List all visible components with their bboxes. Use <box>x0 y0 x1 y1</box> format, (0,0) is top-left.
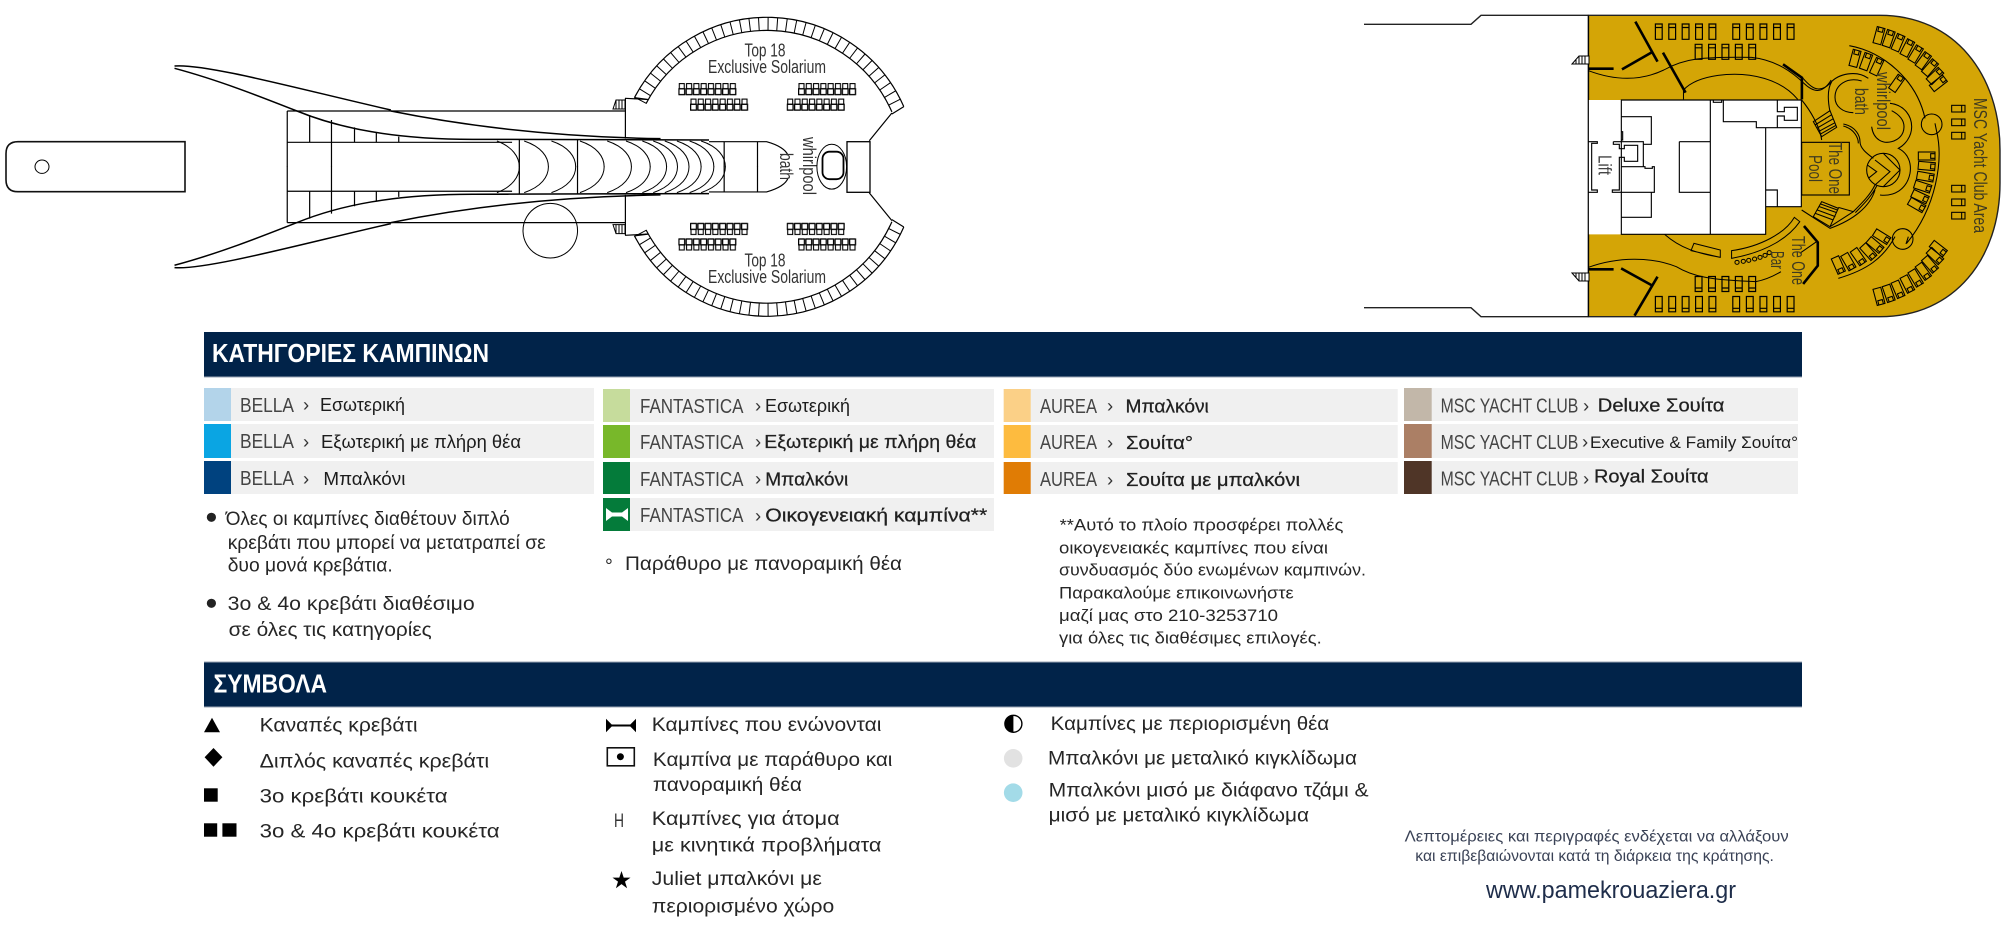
row: Executive and Family suite <box>1404 424 1798 458</box>
right deck plan: MSC Yacht Club <box>1364 15 2000 317</box>
row: Fantastica balcony <box>603 462 994 494</box>
row: Aurea suite with balcony <box>1004 462 1398 494</box>
panel: Fantastica categories <box>603 389 994 531</box>
row: Bella interior: › <box>303 394 309 415</box>
header: cabin categories <box>204 332 1802 378</box>
label: bottom solarium: Exclusive Solarium <box>708 266 826 287</box>
row: Fantastica ocean view: FANTASTICA <box>640 431 744 454</box>
row: Aurea balcony: Μπαλκόνι <box>1126 396 1209 417</box>
label: whirlpool bath: whirlpool <box>799 136 820 195</box>
row: Aurea balcony <box>1004 389 1398 422</box>
deck labels: Bar <box>1767 251 1788 269</box>
row: Royal suite: Royal Σουίτα <box>1594 466 1709 487</box>
interior white block <box>1588 15 1801 317</box>
header: symbols: ΣΥΜΒΟΛΑ <box>214 669 327 699</box>
note: family cabins: **Αυτό το πλοίο προσφέρει πολλές <box>1060 516 1343 535</box>
legend: obstructed view: Καμπίνες με περιορισμένη θέα <box>1051 713 1329 735</box>
deck labels: The One <box>1788 236 1809 285</box>
label: top solarium <box>708 40 826 77</box>
label: whirlpool bath: bath <box>776 153 797 180</box>
legend: accessible cabins: H <box>614 811 624 832</box>
legend: double sofa bed: Διπλός καναπές κρεβάτι <box>260 750 489 772</box>
thick walls and curved paths <box>1588 22 1831 316</box>
legend: Juliet balcony: Juliet μπαλκόνι με <box>652 868 822 890</box>
row: Bella balcony: › <box>303 468 309 489</box>
row: Aurea suite with balcony: AUREA <box>1040 468 1097 491</box>
note: family cabins <box>1059 516 1366 647</box>
row: Executive and Family suite: › <box>1582 431 1588 452</box>
row: Bella interior: BELLA <box>240 394 294 417</box>
row: Fantastica ocean view: Εξωτερική με πλήρη θέα <box>764 431 977 452</box>
legend: half glass balcony <box>1004 780 1369 827</box>
side stairs <box>1572 56 1589 281</box>
row: Aurea balcony: › <box>1107 395 1113 416</box>
row: Fantastica family: FANTASTICA <box>640 504 744 527</box>
row: Royal suite: › <box>1583 468 1589 489</box>
header: symbols <box>204 662 1802 708</box>
row: Deluxe suite: Deluxe Σουίτα <box>1598 395 1725 416</box>
row: Aurea suite: Σουίτα° <box>1126 432 1193 453</box>
row: Deluxe suite: › <box>1583 395 1589 416</box>
legend: sofa bed: Καναπές κρεβάτι <box>260 715 418 737</box>
legend: connecting cabins: Καμπίνες που ενώνονται <box>652 714 881 736</box>
row: Bella interior <box>204 388 594 421</box>
row: Fantastica family: Οικογενειακή καμπίνα** <box>765 505 987 526</box>
row: Bella ocean view <box>204 424 594 458</box>
legend: double sofa bed <box>205 748 489 772</box>
row: Bella ocean view: Εξωτερική με πλήρη θέα <box>321 431 521 452</box>
row: Executive and Family suite: Executive & Family Σουίτα° <box>1590 434 1798 452</box>
row: Royal suite <box>1404 461 1798 494</box>
note: family cabins: μαζί μας στο 210-3253710 <box>1059 606 1278 625</box>
row: Fantastica balcony: FANTASTICA <box>640 468 744 491</box>
deck labels: Pool <box>1805 155 1826 182</box>
row: Bella ocean view: BELLA <box>240 430 294 453</box>
row: Aurea suite with balcony: Σουίτα με μπαλκόνι <box>1126 469 1300 490</box>
row: Fantastica ocean view: › <box>755 431 761 452</box>
row: Aurea suite with balcony: › <box>1107 469 1113 490</box>
deck labels: MSC Yacht Club Area <box>1970 98 1991 234</box>
pool area, whirlpools and curved loungers <box>1802 27 1965 305</box>
row: Fantastica balcony: Μπαλκόνι <box>765 469 848 490</box>
note: family cabins: Παρακαλούμε επικοινωνήστε <box>1059 583 1294 602</box>
row: Deluxe suite: MSC YACHT CLUB <box>1441 395 1578 418</box>
disclaimer: και επιβεβαιώνονται κατά τη διάρκεια της κράτησης. <box>1415 848 1774 865</box>
note: bed information: κρεβάτι που μπορεί να μετατραπεί σε <box>228 532 546 554</box>
row: Deluxe suite <box>1404 388 1798 421</box>
row: Aurea suite <box>1004 425 1398 458</box>
label: bottom solarium: Top 18 <box>744 250 786 270</box>
note: family cabins: για όλες τις διαθέσιμες επιλογές. <box>1059 628 1322 647</box>
label: top solarium: Exclusive Solarium <box>708 56 826 77</box>
row: Fantastica balcony: › <box>755 468 761 489</box>
legend: half glass balcony: μισό με μεταλικό κιγκλίδωμα <box>1049 805 1309 827</box>
row: Bella balcony <box>204 461 594 494</box>
left deck plan: aft sun deck <box>6 17 904 316</box>
deck labels <box>1594 71 1991 285</box>
legend: Juliet balcony: περιορισμένο χώρο <box>652 896 834 918</box>
panel: Aurea categories <box>1004 389 1398 494</box>
row: Bella balcony: Μπαλκόνι <box>323 468 405 489</box>
aft platform <box>6 142 185 192</box>
row: Bella balcony: BELLA <box>240 467 294 490</box>
row: Fantastica family: › <box>755 505 761 526</box>
solarium dome top <box>613 17 904 141</box>
legend: third bed bunk: 3ο κρεβάτι κουκέτα <box>260 785 448 807</box>
note: bed information: Όλες οι καμπίνες διαθέτουν διπλό <box>225 508 510 530</box>
legend: accessible cabins <box>614 808 881 857</box>
panel: MSC Yacht Club categories <box>1404 388 1798 494</box>
row: Bella interior: Εσωτερική <box>320 394 405 415</box>
row: Fantastica interior: Εσωτερική <box>765 395 850 416</box>
sun lounger rows <box>1655 24 1794 312</box>
row: Aurea suite: › <box>1107 432 1113 453</box>
hull fins and stairs <box>175 66 847 268</box>
legend: accessible cabins: με κινητικά προβλήματα <box>652 835 881 857</box>
note: bed information <box>207 508 546 641</box>
legend: half glass balcony: Μπαλκόνι μισό με διάφανο τζάμι & <box>1049 780 1369 802</box>
note: bed information: δυο μονά κρεβάτια. <box>228 555 393 577</box>
note: panoramic window: Παράθυρο με πανοραμική θέα <box>625 553 902 575</box>
disclaimer <box>1405 829 1789 865</box>
legend: Juliet balcony <box>612 868 834 918</box>
row: Fantastica family <box>603 498 994 531</box>
note: panoramic window: ° <box>605 555 613 577</box>
deck labels: whirlpool <box>1873 71 1894 130</box>
legend: third and fourth bed bunk: 3ο & 4ο κρεβάτι κουκέτα <box>260 820 500 842</box>
legend: cabin with panoramic window: πανοραμική θέα <box>653 774 802 796</box>
row: Fantastica ocean view <box>603 425 994 458</box>
hull outline with gold deck <box>1364 15 2000 317</box>
note: family cabins: συνδυασμός δύο ενωμένων καμπινών. <box>1059 561 1366 580</box>
disclaimer: Λεπτομέρειες και περιγραφές ενδέχεται να αλλάξουν <box>1405 829 1789 846</box>
website: www.pamekrouaziera.gr <box>1485 877 1736 904</box>
row: Executive and Family suite: MSC YACHT CLUB <box>1441 431 1578 454</box>
legend: accessible cabins: Καμπίνες για άτομα <box>652 808 840 830</box>
note: family cabins: οικογενειακές καμπίνες που είναι <box>1059 538 1328 557</box>
legend: metal railing balcony: Μπαλκόνι με μεταλικό κιγκλίδωμα <box>1048 747 1357 769</box>
legend: third bed bunk <box>204 785 448 807</box>
deck labels: bath <box>1851 88 1872 115</box>
label: bottom solarium <box>708 250 826 287</box>
panel: Bella categories <box>204 388 594 494</box>
label: top solarium: Top 18 <box>744 40 786 60</box>
deck labels: Lift <box>1594 155 1616 175</box>
whirlpool oval <box>822 142 870 192</box>
deck labels: The One <box>1825 142 1846 194</box>
row: Fantastica interior: FANTASTICA <box>640 395 744 418</box>
row: Fantastica interior: › <box>755 395 761 416</box>
row: Aurea balcony: AUREA <box>1040 395 1097 418</box>
legend: sofa bed <box>204 715 418 737</box>
header: cabin categories: ΚΑΤΗΓΟΡΙΕΣ ΚΑΜΠΙΝΩΝ <box>212 338 489 368</box>
legend: cabin with panoramic window <box>607 748 892 796</box>
label: whirlpool bath <box>776 136 820 195</box>
solarium dome bottom <box>613 193 904 316</box>
note: bed information: σε όλες τις κατηγορίες <box>229 619 432 641</box>
legend: cabin with panoramic window: Καμπίνα με παράθυρο και <box>653 749 892 771</box>
row: Royal suite: MSC YACHT CLUB <box>1441 467 1578 490</box>
row: Aurea suite: AUREA <box>1040 431 1097 454</box>
row: Fantastica interior <box>603 389 994 422</box>
row: Bella ocean view: › <box>303 431 309 452</box>
note: bed information: 3ο & 4ο κρεβάτι διαθέσιμο <box>228 593 475 615</box>
